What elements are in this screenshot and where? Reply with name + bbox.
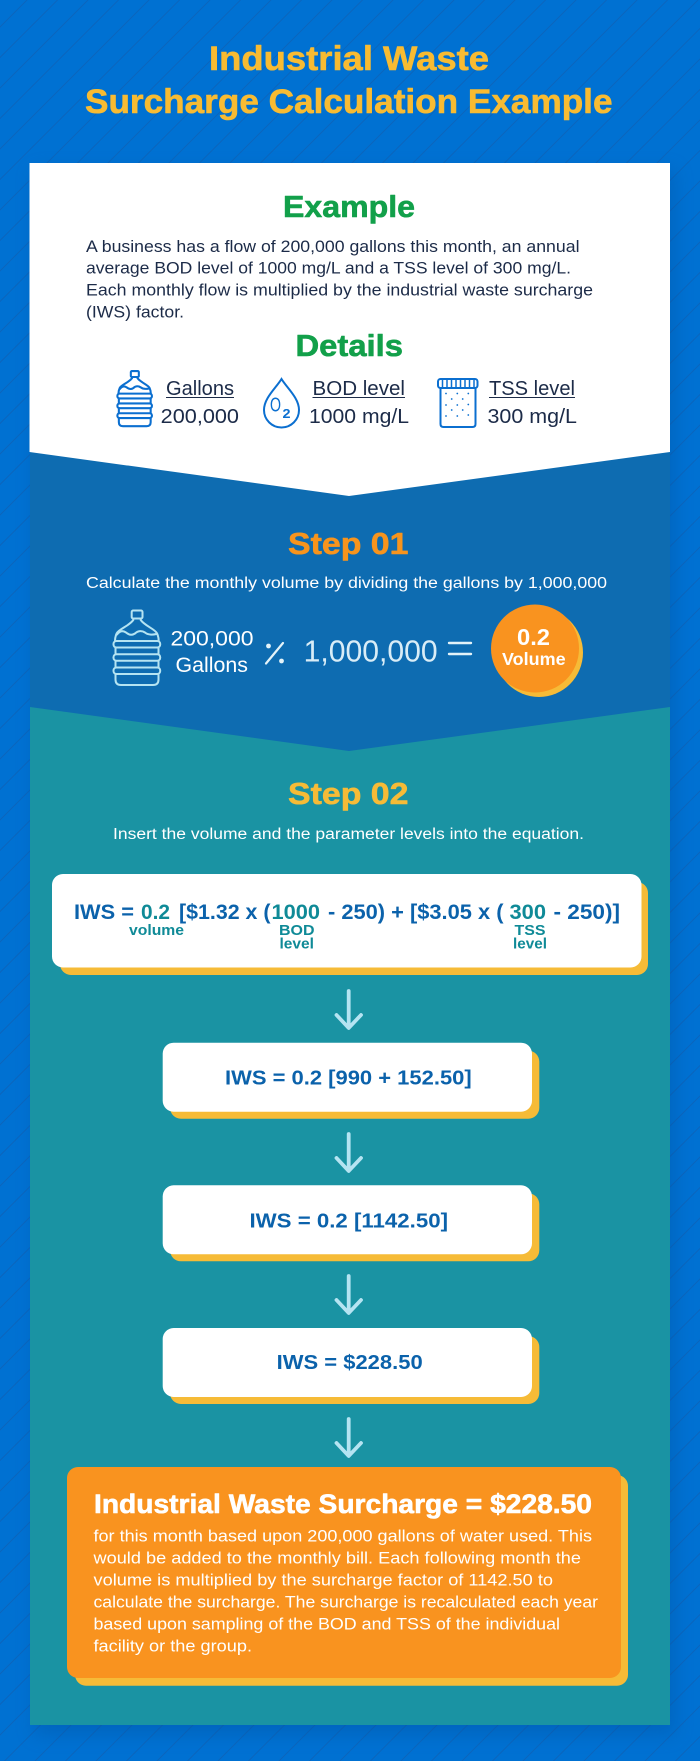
final body text: [92, 1528, 599, 1656]
equation: - 250)]: [554, 901, 620, 924]
text: example description: [86, 238, 593, 322]
heading: step 01: Step 01: [288, 526, 408, 561]
equation labels: level: [513, 936, 547, 953]
equation labels: volume: [129, 922, 184, 939]
icon: sample jar: [438, 379, 478, 427]
badge: volume result: 0.2: [517, 624, 550, 650]
equation: 300: [510, 901, 546, 924]
icon: equals sign: [449, 643, 471, 654]
detail: BOD level: 1000 mg/L: [309, 405, 409, 428]
arrow 3: [336, 1276, 361, 1313]
equation labels: TSS: [514, 922, 546, 939]
text: example description: A business has a flow of 200,000 gallons this month, an annual: [86, 238, 580, 256]
card: final surcharge: [67, 1467, 628, 1686]
text: step 02 instruction: Insert the volume and the parameter levels into the equation.: [113, 826, 584, 843]
equation: IWS =: [74, 901, 134, 924]
card: step result 1: IWS = 0.2 [990 + 152.50]: [225, 1066, 472, 1089]
final body text: calculate the surcharge. The surcharge is recalculated each year: [94, 1594, 599, 1612]
panel: example: [30, 163, 670, 496]
text: gallons amount: 200,000: [170, 628, 254, 651]
detail: gallons: Gallons: [166, 378, 234, 400]
final body text: would be added to the monthly bill. Each following month the: [92, 1550, 581, 1568]
arrow 2: [336, 1134, 361, 1171]
equation labels: level: [280, 936, 314, 953]
icon: oxygen drop: [264, 379, 299, 428]
detail: gallons: 200,000: [161, 405, 239, 428]
panel: step 02: [30, 690, 670, 1725]
card: step result 2: [163, 1185, 539, 1261]
heading: example: Example: [283, 190, 415, 224]
arrow 1: [336, 991, 361, 1028]
arrow 4: [336, 1419, 361, 1456]
detail: TSS level: [438, 378, 577, 428]
final body text: volume is multiplied by the surcharge factor of 1142.50 to: [94, 1572, 553, 1590]
heading: step 02: Step 02: [288, 776, 408, 811]
icon: bottle: [117, 371, 152, 426]
badge: volume result: Volume: [502, 649, 566, 669]
final body text: based upon sampling of the BOD and TSS of the individual: [94, 1616, 560, 1634]
title: Industrial Waste: [209, 40, 489, 78]
heading: details: Details: [296, 329, 403, 363]
card: step result 3: [163, 1328, 539, 1404]
equation: 1000: [272, 901, 320, 924]
equation labels: [129, 922, 547, 953]
equation: [74, 901, 620, 924]
equation labels: BOD: [279, 922, 315, 939]
icon: water bottle: [114, 610, 160, 685]
text: step 01 instruction: Calculate the monthly volume by dividing the gallons by 1,000,000: [86, 575, 607, 592]
detail: TSS level: 300 mg/L: [488, 405, 577, 428]
text: example description: Each monthly flow is multiplied by the industrial waste surcharge: [86, 282, 593, 300]
detail: TSS level: TSS level: [489, 378, 575, 400]
text: example description: (IWS) factor.: [86, 304, 184, 322]
title: [85, 40, 612, 121]
detail: BOD level: [264, 378, 409, 428]
text: example description: average BOD level of 1000 mg/L and a TSS level of 300 mg/L.: [86, 260, 571, 278]
final heading: Industrial Waste Surcharge = $228.50: [94, 1489, 592, 1519]
text: divisor: 1,000,000: [304, 634, 438, 669]
icon: divide sign: [266, 643, 284, 664]
equation: - 250) + [$3.05 x (: [328, 901, 504, 924]
final body text: facility or the group.: [94, 1638, 252, 1656]
detail: BOD level: BOD level: [312, 378, 405, 400]
text: gallons amount: Gallons: [176, 654, 248, 677]
detail: gallons: [117, 371, 239, 428]
equation: [$1.32 x (: [179, 901, 271, 924]
icon: oxygen drop: O: [270, 394, 281, 416]
card: step result 2: IWS = 0.2 [1142.50]: [250, 1209, 448, 1232]
panel: step 01: [30, 440, 670, 751]
icon: oxygen drop: 2: [282, 406, 290, 421]
card: step result 1: [163, 1043, 539, 1119]
text: gallons amount: [170, 628, 254, 677]
card: main equation: [52, 874, 648, 975]
card: step result 3: IWS = $228.50: [277, 1351, 423, 1374]
badge: volume result: [491, 604, 583, 697]
final body text: for this month based upon 200,000 gallons of water used. This: [94, 1528, 592, 1546]
title: Surcharge Calculation Example: [85, 83, 612, 121]
equation: 0.2: [141, 901, 170, 924]
